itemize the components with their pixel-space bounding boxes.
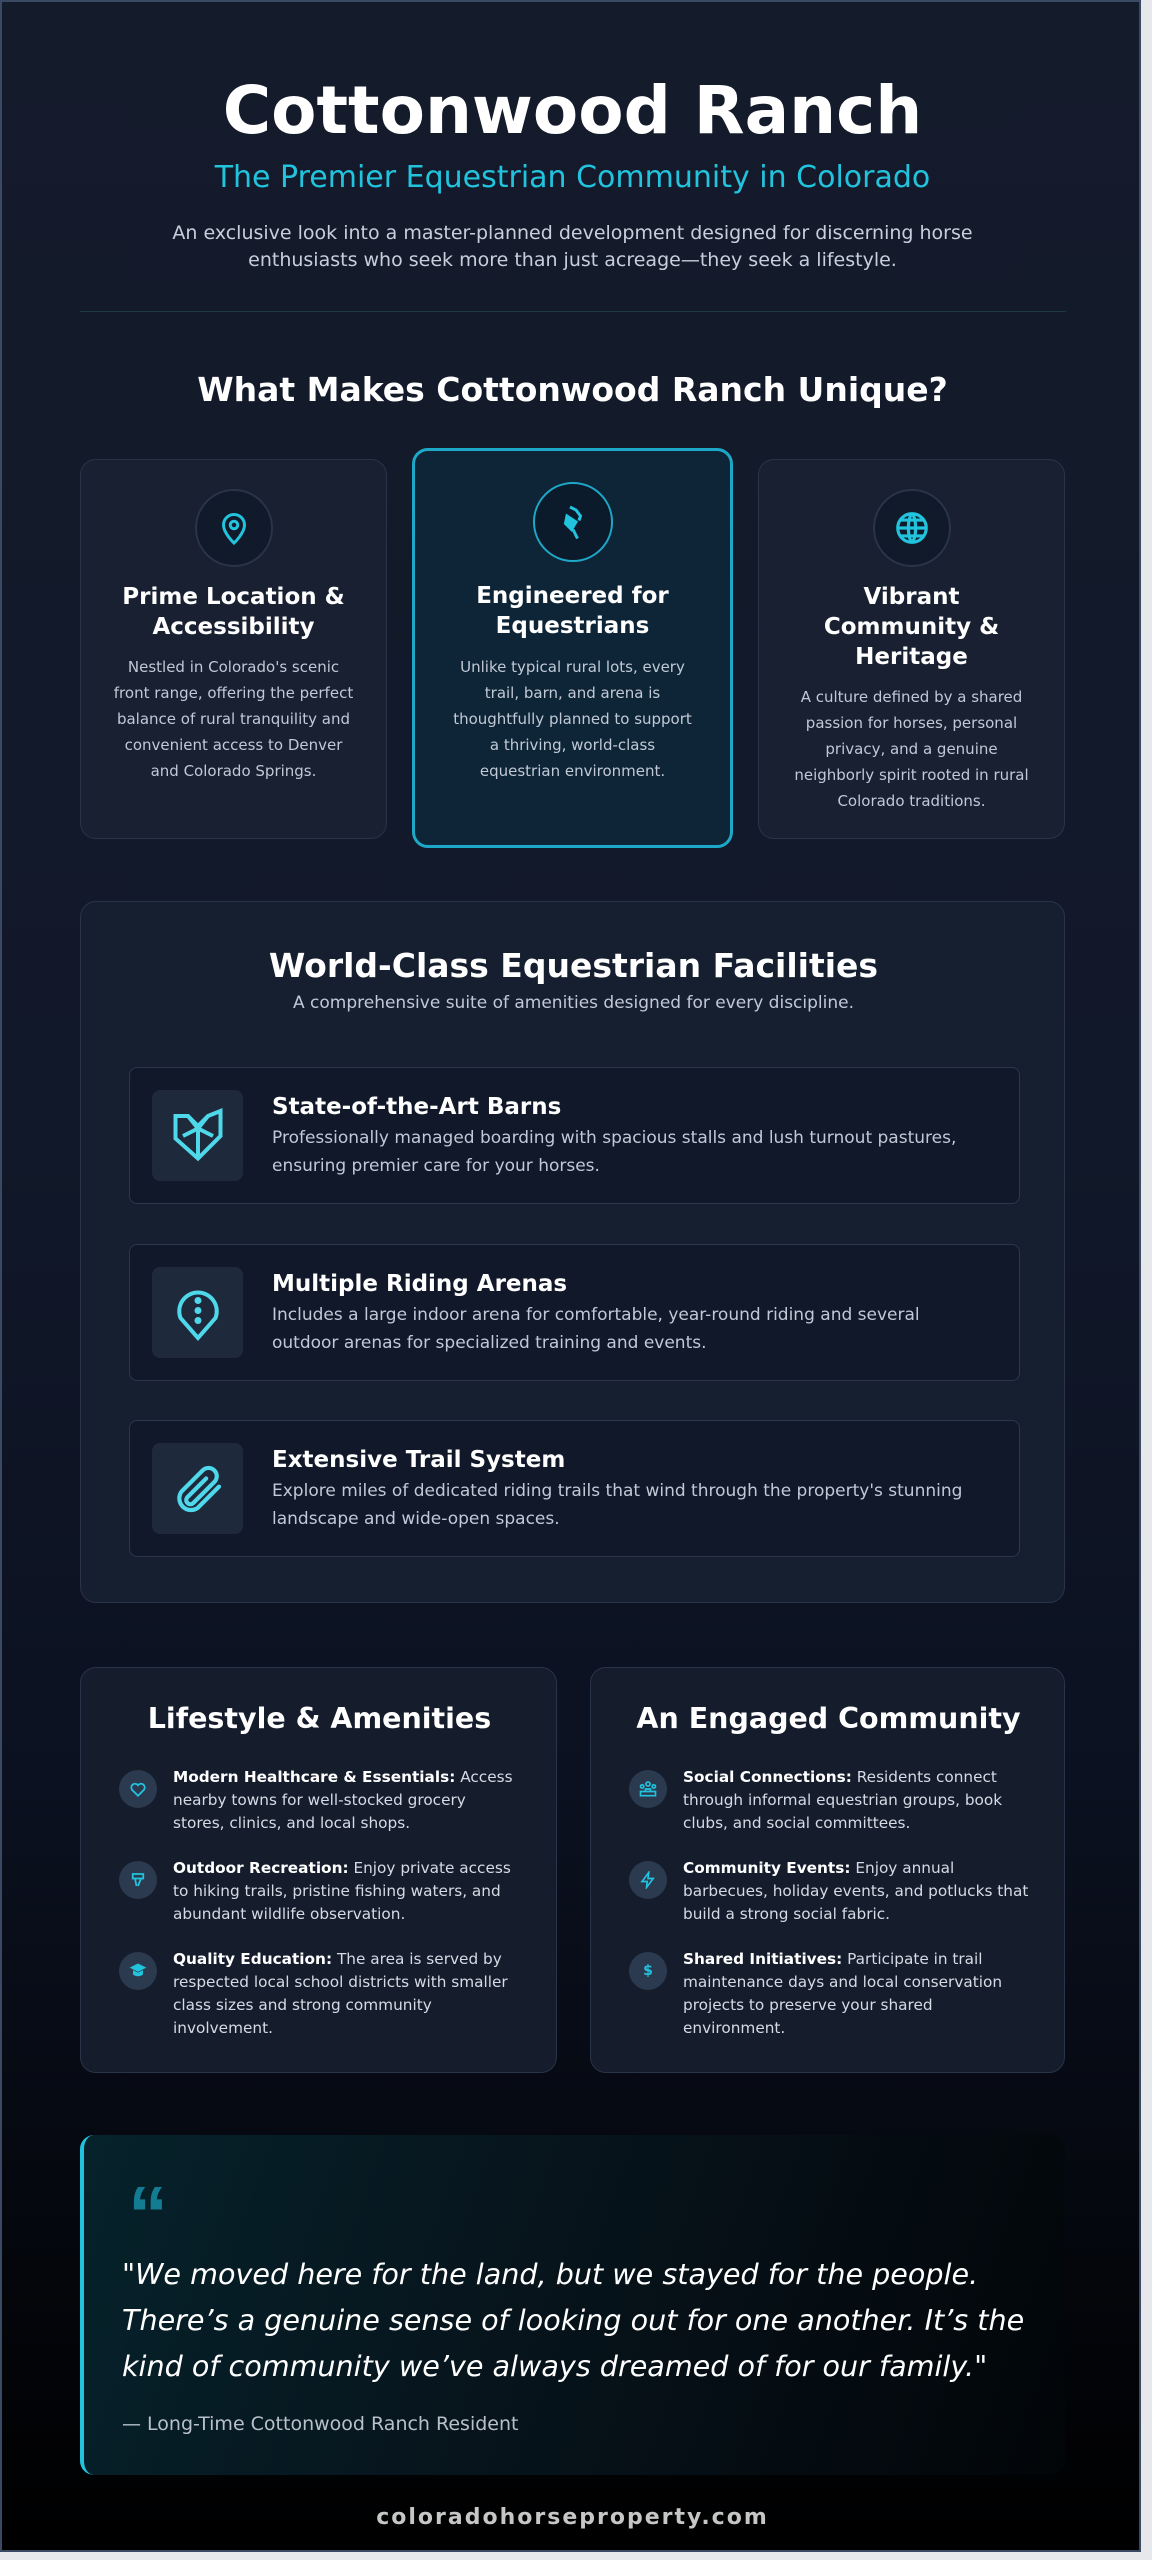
item: trails xyxy=(129,1420,1020,1557)
panel: lifestyle: Outdoor Recreation: Enjoy private access xyxy=(173,1859,511,1877)
icon: bolt xyxy=(629,1861,667,1899)
item: healthcare xyxy=(119,1768,513,1832)
item: initiatives xyxy=(629,1950,1002,2037)
icon: equestrian xyxy=(533,482,613,562)
card: community heritage xyxy=(758,459,1065,839)
card title: Prime Location & xyxy=(122,584,345,610)
card text: convenient access to Denver xyxy=(125,736,342,754)
item text: outdoor arenas for specialized training and events. xyxy=(272,1333,706,1353)
card title xyxy=(122,584,345,640)
panel: lifestyle: respected local school districts with smaller xyxy=(173,1973,508,1991)
card: engineered (highlighted) xyxy=(412,448,733,848)
heading: community: An Engaged Community xyxy=(636,1702,1021,1735)
panel: community: barbecues, holiday events, and potlucks that xyxy=(683,1882,1028,1900)
quote text: "We moved here for the land, but we stayed for the people. xyxy=(122,2257,978,2291)
panel: lifestyle: to hiking trails, pristine fishing waters, and xyxy=(173,1882,501,1900)
footer url: coloradohorseproperty.com xyxy=(376,2505,769,2530)
facilities subtitle: A comprehensive suite of amenities designed for every discipline. xyxy=(293,993,854,1013)
card: prime location xyxy=(80,459,387,839)
panel: lifestyle: involvement. xyxy=(173,2019,273,2037)
quote text: kind of community we’ve always dreamed of for our family." xyxy=(122,2349,987,2383)
heading: unique: What Makes Cottonwood Ranch Unique? xyxy=(197,370,948,409)
panel: community: through informal equestrian groups, book xyxy=(683,1791,1002,1809)
card text: Unlike typical rural lots, every xyxy=(460,658,685,676)
icon: globe xyxy=(873,489,951,567)
item title: Multiple Riding Arenas xyxy=(272,1271,567,1297)
panel: lifestyle xyxy=(80,1667,557,2073)
panel: community: Shared Initiatives: Participate in trail xyxy=(683,1950,983,1968)
card text xyxy=(114,658,353,780)
intro text: enthusiasts who seek more than just acreage—they seek a lifestyle. xyxy=(248,249,897,271)
panel: lifestyle: Quality Education: The area is served by xyxy=(173,1950,502,1968)
icon: quote mark: “ xyxy=(128,2170,168,2259)
card title xyxy=(824,584,999,670)
panel: lifestyle: abundant wildlife observation. xyxy=(173,1905,405,1923)
card text: front range, offering the perfect xyxy=(114,684,353,702)
icon: arena xyxy=(152,1267,243,1358)
card text: thoughtfully planned to support xyxy=(453,710,692,728)
panel: lifestyle: stores, clinics, and local shops. xyxy=(173,1814,410,1832)
card text: a thriving, world-class xyxy=(490,736,655,754)
panel: lifestyle: Modern Healthcare & Essentials: Access xyxy=(173,1768,513,1786)
icon: people xyxy=(629,1770,667,1808)
quote text: There’s a genuine sense of looking out for one another. It’s the xyxy=(122,2303,1024,2337)
item title: Extensive Trail System xyxy=(272,1447,565,1473)
panel: community: build a strong social fabric. xyxy=(683,1905,890,1923)
card text: A culture defined by a shared xyxy=(801,688,1022,706)
card text xyxy=(794,688,1029,810)
panel: community: Community Events: Enjoy annual xyxy=(683,1859,954,1877)
card text: trail, barn, and arena is xyxy=(485,684,660,702)
card text: balance of rural tranquility and xyxy=(117,710,350,728)
card text: passion for horses, personal xyxy=(806,714,1017,732)
item text xyxy=(272,1128,956,1176)
card title: Community & xyxy=(824,614,999,640)
item text: landscape and wide-open spaces. xyxy=(272,1509,560,1529)
icon: outdoor xyxy=(119,1861,157,1899)
card title: Equestrians xyxy=(496,613,649,639)
card title: Heritage xyxy=(855,644,968,670)
panel: community xyxy=(590,1667,1065,2073)
icon: dollar: $ xyxy=(643,1963,653,1979)
card text: Nestled in Colorado's scenic xyxy=(128,658,339,676)
card title: Engineered for xyxy=(476,583,669,609)
icon: dollar xyxy=(629,1952,667,1990)
item text: Explore miles of dedicated riding trails that wind through the property's stunning xyxy=(272,1481,962,1501)
item text xyxy=(272,1305,920,1353)
item text: ensuring premier care for your horses. xyxy=(272,1156,600,1176)
item: arenas xyxy=(129,1244,1020,1381)
card title: Vibrant xyxy=(864,584,959,610)
intro text xyxy=(172,222,973,271)
attribution: — Long-Time Cottonwood Ranch Resident xyxy=(122,2413,518,2435)
item text xyxy=(272,1481,962,1529)
item: barns xyxy=(129,1067,1020,1204)
icon: education xyxy=(119,1952,157,1990)
heading: lifestyle: Lifestyle & Amenities xyxy=(148,1702,491,1735)
subtitle: The Premier Equestrian Community in Colorado xyxy=(215,160,930,195)
icon: paperclip xyxy=(152,1443,243,1534)
card text: equestrian environment. xyxy=(480,762,665,780)
item text: Professionally managed boarding with spacious stalls and lush turnout pastures, xyxy=(272,1128,956,1148)
card text: Colorado traditions. xyxy=(837,792,986,810)
panel: community: maintenance days and local conservation xyxy=(683,1973,1002,1991)
card text xyxy=(453,658,692,780)
title: Cottonwood Ranch xyxy=(223,72,922,149)
panel: facilities xyxy=(80,901,1065,1603)
card title xyxy=(476,583,669,639)
quote text xyxy=(122,2257,1024,2383)
panel: community: clubs, and social committees. xyxy=(683,1814,910,1832)
item: events xyxy=(629,1859,1028,1923)
panel: community: environment. xyxy=(683,2019,785,2037)
panel: lifestyle: class sizes and strong community xyxy=(173,1996,432,2014)
card text: and Colorado Springs. xyxy=(151,762,316,780)
icon: heart xyxy=(119,1770,157,1808)
item: social xyxy=(629,1768,1002,1832)
panel: community: Social Connections: Residents connect xyxy=(683,1768,997,1786)
panel: community: projects to preserve your shared xyxy=(683,1996,933,2014)
card title: Accessibility xyxy=(152,614,315,640)
intro text: An exclusive look into a master-planned development designed for discerning horse xyxy=(172,222,973,244)
panel: lifestyle: nearby towns for well-stocked grocery xyxy=(173,1791,466,1809)
item title: State-of-the-Art Barns xyxy=(272,1094,561,1120)
item: outdoor xyxy=(119,1859,511,1923)
item: education xyxy=(119,1950,508,2037)
icon: barn xyxy=(152,1090,243,1181)
icon: location pin xyxy=(195,489,273,567)
quote callout xyxy=(80,2135,1065,2475)
item text: Includes a large indoor arena for comfortable, year-round riding and several xyxy=(272,1305,920,1325)
card text: neighborly spirit rooted in rural xyxy=(794,766,1029,784)
heading: facilities: World-Class Equestrian Facilities xyxy=(269,946,878,985)
card text: privacy, and a genuine xyxy=(825,740,998,758)
